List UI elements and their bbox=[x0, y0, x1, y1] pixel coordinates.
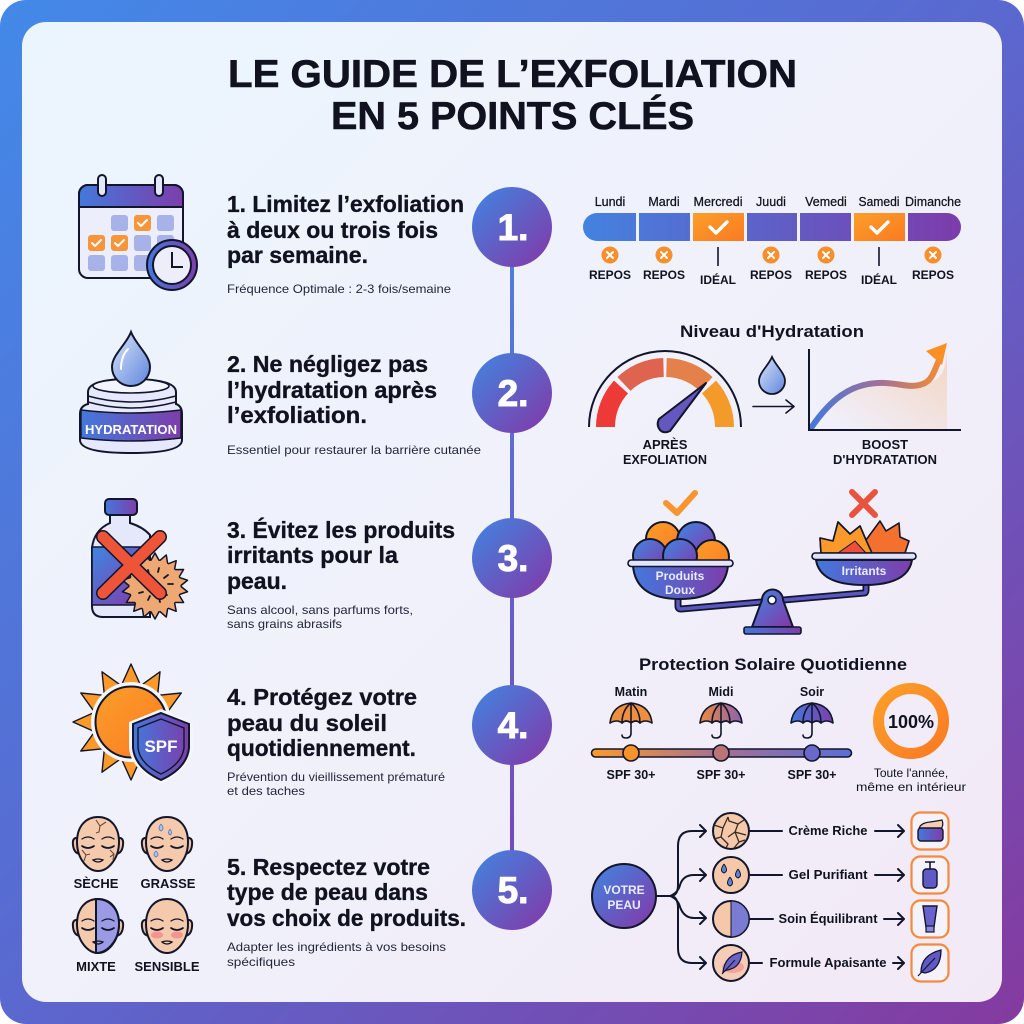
hydration chart bbox=[589, 322, 961, 467]
subtext 3: sans grains abrasifs bbox=[227, 617, 342, 631]
product icon: cream bbox=[912, 812, 948, 850]
time labels bbox=[615, 685, 824, 699]
timeline badge 3: 3. bbox=[498, 538, 528, 579]
icon: sun with SPF shield: SPF bbox=[144, 737, 178, 756]
day labels: Mercredi bbox=[694, 195, 742, 209]
product icon: pump bottle bbox=[912, 856, 948, 894]
heading 5: 5. Respectez votre bbox=[227, 854, 430, 880]
daily sun protection chart bbox=[592, 655, 966, 794]
time labels: Matin bbox=[615, 685, 647, 699]
rest and ideal labels: IDÉAL bbox=[700, 272, 736, 287]
spf labels bbox=[606, 768, 836, 782]
umbrella evening bbox=[791, 703, 833, 738]
icon: hydration jar with drop: HYDRATATION bbox=[85, 422, 177, 437]
timeline badge 5 bbox=[472, 850, 552, 930]
timeline badge 2 bbox=[472, 353, 552, 433]
label: sensitive: SENSIBLE bbox=[134, 959, 200, 974]
rest and ideal labels: IDÉAL bbox=[861, 272, 897, 287]
subtext 4: Prévention du vieillissement prématuré bbox=[227, 770, 445, 784]
subtext 5: spécifiques bbox=[227, 955, 295, 969]
heading 5: type de peau dans bbox=[227, 879, 428, 905]
heading 2: 2. Ne négligez pas bbox=[227, 351, 428, 377]
growth curve bbox=[809, 343, 961, 430]
root node: VOTRE bbox=[603, 883, 645, 897]
protection heading: Protection Solaire Quotidienne bbox=[639, 655, 907, 674]
subtext 5 bbox=[227, 940, 446, 969]
heading 4: peau du soleil bbox=[227, 710, 387, 736]
heading 3: 3. Évitez les produits bbox=[227, 516, 455, 543]
rest and ideal labels: REPOS bbox=[589, 268, 631, 282]
gauge bbox=[589, 351, 741, 432]
timeline badge 4: 4. bbox=[498, 705, 528, 746]
icon: sun with SPF shield bbox=[73, 664, 193, 784]
heading 4 bbox=[227, 684, 417, 761]
root node: PEAU bbox=[607, 898, 641, 912]
subtext 3 bbox=[227, 603, 413, 631]
scale beam bbox=[678, 583, 866, 609]
icon: hydration jar with drop bbox=[80, 332, 182, 453]
week schedule chart bbox=[583, 195, 961, 287]
balance scale bbox=[628, 492, 916, 634]
spf labels: SPF 30+ bbox=[788, 768, 836, 782]
day labels: Juudi bbox=[756, 195, 786, 209]
product labels: Soin Équilibrant bbox=[778, 911, 878, 926]
subtext 2: Essentiel pour restaurer la barrière cutanée bbox=[227, 443, 481, 457]
heading 3: peau. bbox=[227, 568, 287, 594]
cross mark bbox=[852, 492, 875, 515]
skin type faces bbox=[73, 817, 200, 974]
rest and ideal labels: REPOS bbox=[750, 268, 792, 282]
rest markers bbox=[602, 246, 942, 266]
subtext 4: et des taches bbox=[227, 784, 305, 798]
hydration heading: Niveau d'Hydratation bbox=[680, 322, 864, 341]
product icon: tube bbox=[912, 900, 948, 938]
time labels: Soir bbox=[800, 685, 824, 699]
day labels: Samedi bbox=[858, 195, 900, 209]
connector lines bbox=[750, 825, 904, 969]
donut caption: Toute l'année, bbox=[874, 766, 948, 780]
timeline badge 1 bbox=[472, 187, 552, 267]
heading 1 bbox=[227, 191, 464, 268]
right bowl with irritants: Irritants bbox=[842, 564, 887, 578]
umbrella morning bbox=[610, 703, 652, 738]
left bowl with soft products bbox=[628, 522, 733, 599]
spf labels: SPF 30+ bbox=[606, 768, 656, 782]
central timeline line bbox=[510, 225, 514, 895]
gauge label: EXFOLIATION bbox=[623, 452, 707, 467]
gauge label: APRÈS bbox=[643, 437, 688, 452]
subtext 5: Adapter les ingrédients à vos besoins bbox=[227, 940, 446, 954]
curve label bbox=[833, 437, 937, 467]
face: oily bbox=[142, 817, 192, 871]
product icon: feather bbox=[912, 944, 948, 982]
heading 5: vos choix de produits. bbox=[227, 905, 466, 931]
left bowl with soft products: Doux bbox=[665, 583, 695, 597]
subtext 1: Fréquence Optimale : 2-3 fois/semaine bbox=[227, 282, 451, 296]
timeline badge 4 bbox=[472, 685, 552, 765]
gauge label bbox=[623, 437, 707, 467]
umbrella noon bbox=[700, 703, 742, 738]
title: LE GUIDE DE L’EXFOLIATION bbox=[228, 53, 797, 96]
product labels: Crème Riche bbox=[788, 823, 868, 838]
label: combination: MIXTE bbox=[76, 959, 116, 974]
donut caption: même en intérieur bbox=[856, 780, 966, 794]
day track bbox=[592, 745, 852, 761]
face: sensitive bbox=[142, 899, 192, 953]
title: EN 5 POINTS CLÉS bbox=[331, 94, 694, 138]
heading 3 bbox=[227, 516, 455, 594]
day labels: Mardi bbox=[648, 195, 680, 209]
dry skin swatch bbox=[713, 813, 749, 849]
time labels: Midi bbox=[708, 685, 734, 699]
water drop and arrow bbox=[753, 357, 794, 413]
oily skin swatch bbox=[713, 857, 749, 893]
product labels bbox=[770, 823, 886, 970]
subtext 3: Sans alcool, sans parfums forts, bbox=[227, 603, 413, 617]
left bowl with soft products: Produits bbox=[656, 569, 705, 583]
week bar bbox=[583, 213, 961, 241]
label: dry: SÈCHE bbox=[74, 876, 119, 891]
heading 1: à deux ou trois fois bbox=[227, 217, 438, 243]
curve label: BOOST bbox=[862, 437, 908, 452]
skin type decision tree bbox=[592, 812, 948, 982]
check mark bbox=[666, 493, 695, 513]
sensitive skin swatch bbox=[713, 945, 749, 981]
face: combination bbox=[73, 899, 123, 953]
heading 1: 1. Limitez l’exfoliation bbox=[227, 191, 464, 217]
day labels: Dimanche bbox=[905, 195, 961, 209]
combination skin swatch bbox=[713, 901, 749, 937]
icon: bottle crossed out with burst bbox=[92, 499, 188, 619]
product labels: Formule Apaisante bbox=[770, 955, 886, 970]
fulcrum bbox=[744, 590, 801, 634]
timeline badge 5: 5. bbox=[498, 870, 528, 911]
day labels: Lundi bbox=[595, 195, 625, 209]
timeline badge 1: 1. bbox=[498, 207, 528, 248]
heading 2: l’exfoliation. bbox=[227, 402, 367, 428]
subtext 4 bbox=[227, 770, 445, 798]
heading 1: par semaine. bbox=[227, 242, 368, 268]
rest and ideal labels: REPOS bbox=[643, 268, 685, 282]
day labels: Vemedi bbox=[805, 195, 847, 209]
rest and ideal labels bbox=[589, 268, 954, 287]
label: oily: GRASSE bbox=[141, 876, 196, 891]
heading 2: l’hydratation après bbox=[227, 377, 437, 403]
heading 4: 4. Protégez votre bbox=[227, 684, 417, 710]
icon: calendar with clock bbox=[79, 175, 197, 290]
day labels bbox=[595, 195, 961, 209]
rest and ideal labels: REPOS bbox=[805, 268, 847, 282]
right bowl with irritants bbox=[812, 521, 916, 585]
timeline badge 3 bbox=[472, 518, 552, 598]
timeline badge 2: 2. bbox=[498, 373, 528, 414]
rest and ideal labels: REPOS bbox=[912, 268, 954, 282]
donut caption bbox=[856, 766, 966, 794]
heading 4: quotidiennement. bbox=[227, 735, 416, 761]
heading 3: irritants pour la bbox=[227, 542, 398, 568]
spf labels: SPF 30+ bbox=[696, 768, 746, 782]
donut 100% bbox=[878, 688, 944, 754]
root node bbox=[592, 864, 656, 928]
title bbox=[228, 53, 797, 138]
product labels: Gel Purifiant bbox=[788, 867, 868, 882]
curve label: D'HYDRATATION bbox=[833, 452, 937, 467]
heading 2 bbox=[227, 351, 437, 428]
donut 100%: 100% bbox=[888, 712, 934, 732]
heading 5 bbox=[227, 854, 466, 931]
branch connectors bbox=[657, 825, 706, 969]
face: dry bbox=[73, 817, 123, 871]
